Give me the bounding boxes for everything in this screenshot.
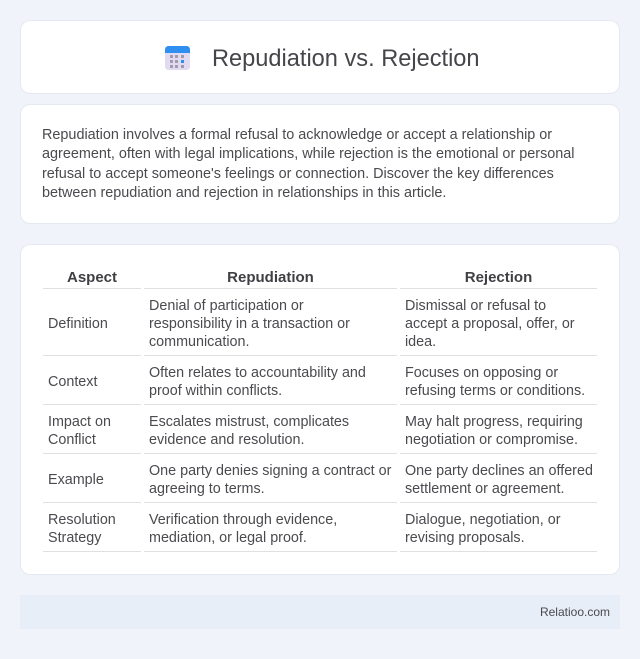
example rejection: One party declines an offered [405, 463, 593, 479]
impact rejection: May halt progress, requiring [405, 414, 583, 430]
icon: calendar [165, 46, 190, 70]
row: impact on conflict: Impact on [48, 414, 111, 430]
impact repudiation: Escalates mistrust, complicates [149, 414, 349, 430]
definition repudiation: communication. [149, 334, 249, 350]
row: resolution strategy: Strategy [48, 530, 101, 546]
context repudiation: Often relates to accountability and [149, 365, 366, 381]
intro text: between repudiation and rejection in relationships in this article. [42, 185, 446, 201]
context repudiation [149, 365, 366, 399]
header: rejection: Rejection [465, 269, 532, 286]
row: resolution strategy: Resolution [48, 512, 116, 528]
example repudiation: One party denies signing a contract or [149, 463, 391, 479]
intro text: refusal to accept someone's feelings or connection. Discover the key differences [42, 166, 554, 182]
example repudiation: agreeing to terms. [149, 481, 265, 497]
resolution rejection: Dialogue, negotiation, or [405, 512, 560, 528]
row: impact on conflict: Conflict [48, 432, 96, 448]
definition rejection [405, 298, 575, 350]
impact repudiation [149, 414, 349, 448]
context rejection: refusing terms or conditions. [405, 383, 585, 399]
intro text: Repudiation involves a formal refusal to acknowledge or accept a relationship or [42, 127, 552, 143]
definition repudiation [149, 298, 350, 350]
definition rejection: Dismissal or refusal to [405, 298, 546, 314]
table panel [20, 244, 620, 575]
example rejection: settlement or agreement. [405, 481, 564, 497]
resolution rejection [405, 512, 560, 546]
footer bar [20, 595, 620, 629]
intro text [42, 127, 575, 201]
impact rejection: negotiation or compromise. [405, 432, 578, 448]
resolution repudiation: Verification through evidence, [149, 512, 337, 528]
definition repudiation: responsibility in a transaction or [149, 316, 350, 332]
row: context: Context [48, 374, 97, 390]
impact rejection [405, 414, 583, 448]
header: aspect: Aspect [67, 269, 117, 286]
definition repudiation: Denial of participation or [149, 298, 304, 314]
row: definition: Definition [48, 316, 108, 332]
title card [20, 20, 620, 94]
title: Repudiation vs. Rejection [212, 46, 480, 72]
row: resolution strategy [48, 512, 116, 546]
example rejection [405, 463, 593, 497]
example repudiation [149, 463, 392, 497]
resolution repudiation: mediation, or legal proof. [149, 530, 307, 546]
impact repudiation: evidence and resolution. [149, 432, 304, 448]
header: repudiation: Repudiation [227, 269, 314, 286]
context repudiation: proof within conflicts. [149, 383, 282, 399]
definition rejection: accept a proposal, offer, or [405, 316, 575, 332]
intro text: agreement, often with legal implications, while rejection is the emotional or personal [42, 146, 575, 162]
resolution rejection: revising proposals. [405, 530, 525, 546]
definition rejection: idea. [405, 334, 436, 350]
context rejection [405, 365, 585, 399]
resolution repudiation [149, 512, 337, 546]
intro panel [20, 104, 620, 224]
context rejection: Focuses on opposing or [405, 365, 558, 381]
row: impact on conflict [48, 414, 111, 448]
footer brand: Relatioo.com [540, 605, 610, 619]
row: example: Example [48, 472, 104, 488]
